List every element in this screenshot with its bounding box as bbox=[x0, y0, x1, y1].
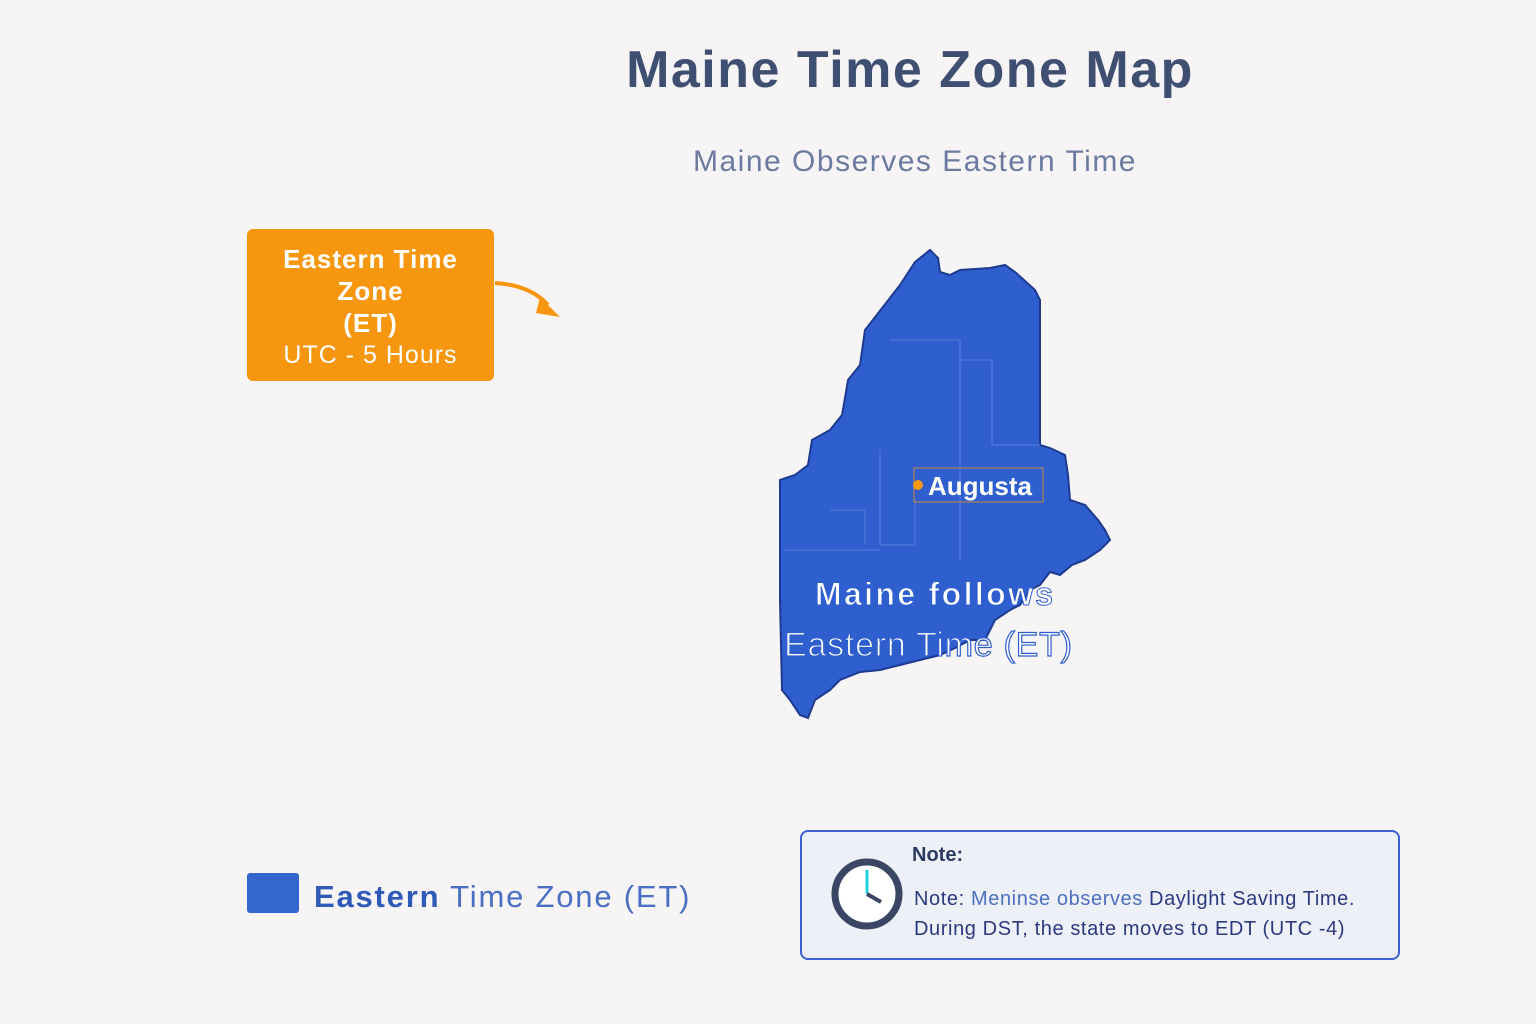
title: Maine Time Zone Map bbox=[626, 41, 1194, 99]
note box: Note: bbox=[912, 844, 963, 866]
callout: eastern time zone: Eastern Time bbox=[283, 244, 458, 274]
note box: Note: Meninse observes Daylight Saving Time. bbox=[914, 888, 1355, 910]
callout: eastern time zone: UTC - 5 Hours bbox=[283, 341, 458, 369]
map label: Eastern Time (ET) bbox=[784, 626, 1072, 664]
map label: Maine follows bbox=[815, 576, 1053, 612]
callout: eastern time zone bbox=[247, 229, 494, 381]
subtitle: Maine Observes Eastern Time bbox=[693, 145, 1137, 178]
legend: Eastern Time Zone (ET) bbox=[314, 879, 691, 914]
note box: During DST, the state moves to EDT (UTC -4) bbox=[914, 918, 1345, 940]
map label bbox=[784, 576, 1072, 664]
Augusta label: Augusta bbox=[928, 471, 1033, 501]
callout: eastern time zone: Zone bbox=[337, 276, 404, 306]
icon: clock bbox=[832, 858, 902, 930]
note box bbox=[800, 830, 1400, 960]
arrow bbox=[494, 281, 560, 317]
callout: eastern time zone: (ET) bbox=[343, 308, 398, 338]
